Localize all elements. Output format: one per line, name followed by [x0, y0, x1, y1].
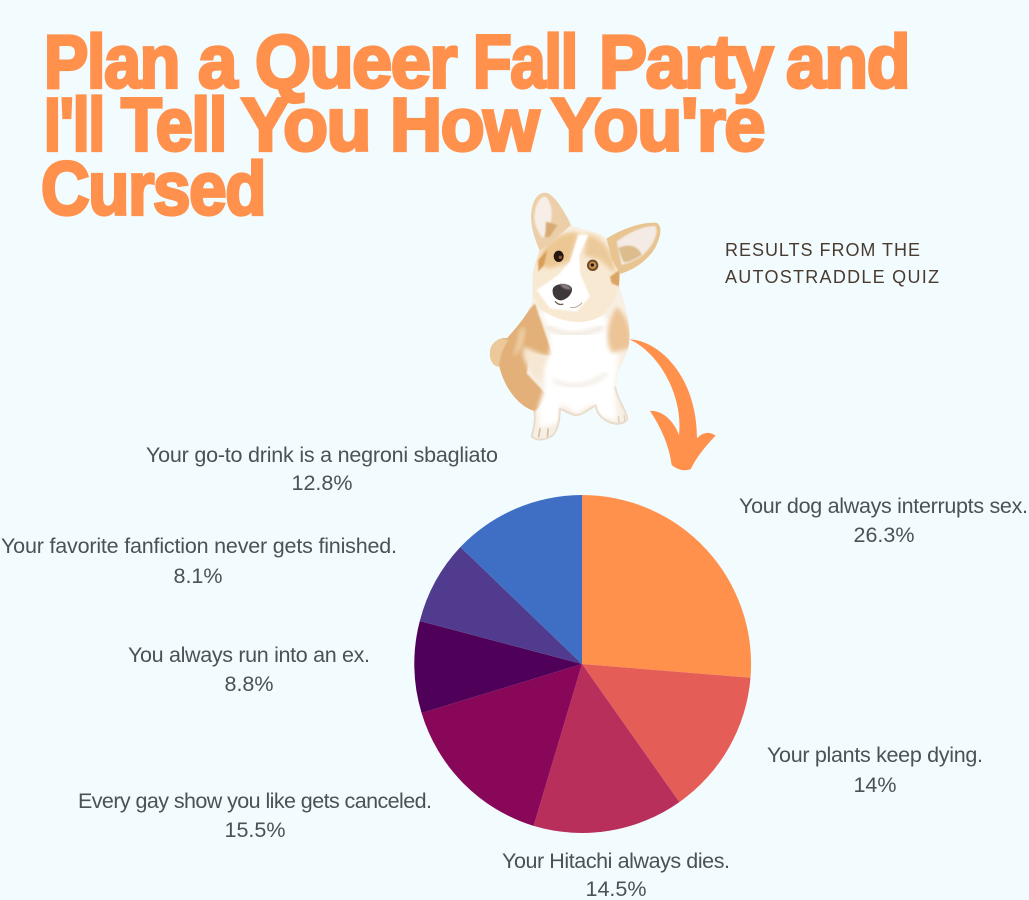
dog rear fur	[490, 303, 552, 413]
title: How	[390, 82, 540, 166]
slice: plants 14%	[582, 664, 750, 802]
label: dog interrupts	[739, 494, 1028, 547]
label: canceled: 15.5%	[225, 818, 285, 842]
title: You	[241, 82, 370, 166]
label: ex: 8.8%	[224, 672, 274, 696]
title: a	[198, 20, 239, 104]
subtitle: results from the quiz: AUTOSTRADDLE QUIZ	[725, 267, 939, 287]
title: Party	[599, 20, 774, 104]
icon: corgi dog	[490, 192, 660, 440]
label: Hitachi: Your Hitachi always dies.	[502, 849, 730, 873]
dog nose	[553, 284, 572, 300]
label: ex: You always run into an ex.	[128, 643, 370, 667]
pie chart	[414, 495, 751, 833]
dog chest	[538, 312, 618, 427]
title: Queer	[255, 20, 457, 104]
label: ex	[128, 643, 370, 696]
dog paw toes	[539, 428, 548, 437]
slice: ex 8.8%	[414, 621, 582, 713]
title: You're	[551, 82, 764, 166]
label: fanfiction: 8.1%	[173, 564, 223, 588]
label: fanfiction: Your favorite fanfiction never gets finished.	[1, 534, 397, 558]
label: canceled: Every gay show you like gets canceled.	[78, 789, 432, 813]
arrow	[629, 339, 716, 470]
dog right ear	[607, 223, 661, 274]
label: canceled	[78, 789, 432, 842]
slice: dog interrupts 26.3%	[582, 495, 751, 678]
dog shoulder fur	[608, 307, 631, 353]
label: negroni: 12.8%	[292, 471, 352, 495]
label: negroni	[146, 443, 498, 495]
slice: negroni 12.8%	[460, 495, 582, 664]
title	[41, 20, 909, 230]
subtitle: results from the quiz: RESULTS FROM THE	[725, 240, 920, 260]
title: and	[786, 20, 909, 104]
title: Plan	[44, 20, 179, 104]
title: Tell	[121, 82, 226, 166]
label: dog interrupts: 26.3%	[854, 523, 914, 547]
label: negroni: Your go-to drink is a negroni sbagliato	[146, 443, 498, 467]
label: fanfiction	[1, 534, 397, 588]
title: I'll	[44, 82, 104, 166]
title: Fall	[473, 20, 577, 104]
dog left ear	[531, 193, 571, 251]
label: Hitachi	[502, 849, 730, 900]
label: plants: 14%	[853, 773, 897, 797]
slice: Hitachi 14.5%	[534, 664, 679, 833]
label: plants	[767, 743, 983, 797]
dog head	[531, 231, 620, 322]
label: dog interrupts: Your dog always interrupts sex.	[739, 494, 1028, 518]
dog eyes	[554, 251, 564, 262]
dog blaze and muzzle	[537, 235, 590, 312]
dog lower edge shading	[531, 387, 628, 440]
slice: canceled 15.5%	[422, 664, 582, 826]
label: plants: Your plants keep dying.	[767, 743, 983, 767]
slice: fanfiction 8.1%	[420, 547, 582, 664]
subtitle: results from the quiz	[725, 240, 939, 287]
title: Cursed	[41, 146, 265, 230]
